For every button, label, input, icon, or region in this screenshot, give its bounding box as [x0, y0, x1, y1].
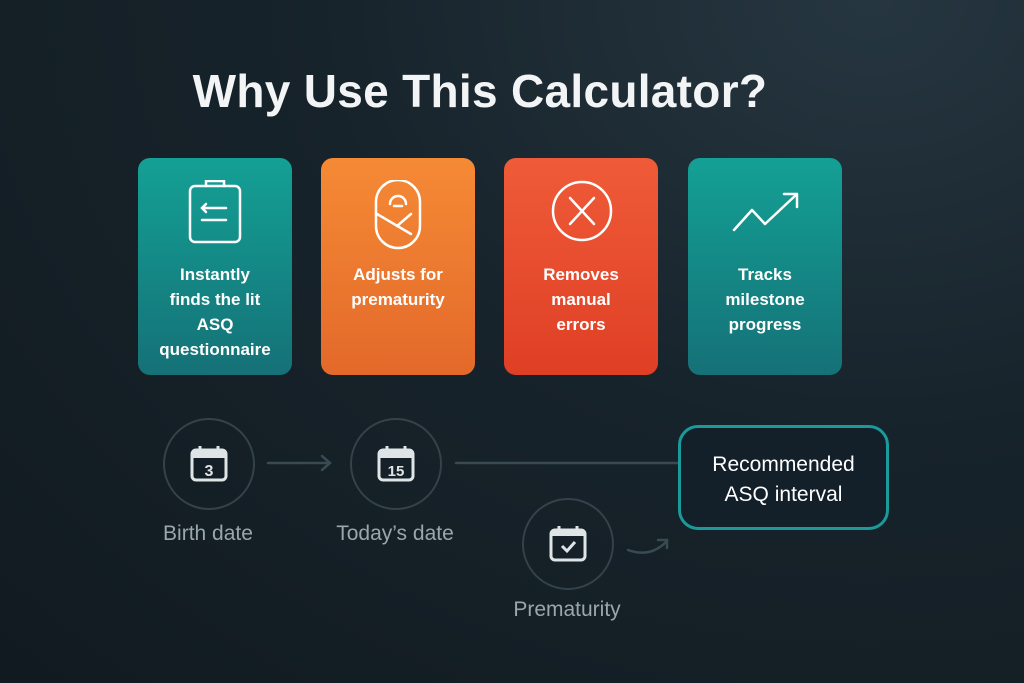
result box — [678, 425, 889, 530]
label: prematurity: Prematurity — [513, 598, 621, 621]
card: instantly finds: finds the lit — [170, 290, 260, 309]
title: Why Use This Calculator? — [193, 65, 767, 117]
card: instantly finds — [138, 158, 292, 375]
card: removes errors: Removes — [543, 265, 619, 284]
step: birth date — [163, 418, 255, 510]
step: birth date: 3 — [205, 463, 214, 480]
icon: x circle — [552, 180, 612, 242]
label: birth date: Birth date — [163, 522, 253, 545]
card: adjusts for prematurity: Adjusts for — [353, 265, 443, 284]
card: adjusts for prematurity — [321, 158, 475, 375]
card: instantly finds: questionnaire — [159, 340, 271, 359]
card: removes errors — [504, 158, 658, 375]
card: removes errors: errors — [556, 315, 606, 334]
icon: clipboard — [188, 180, 242, 244]
step: prematurity — [522, 498, 614, 590]
card: adjusts for prematurity: prematurity — [351, 290, 445, 309]
icon: trend arrow — [732, 192, 798, 232]
card: instantly finds: Instantly — [180, 265, 250, 284]
icon: swaddled baby — [374, 180, 422, 250]
card: instantly finds: ASQ — [197, 315, 233, 334]
card: tracks progress: Tracks — [738, 265, 792, 284]
card: tracks progress: progress — [729, 315, 801, 334]
card: tracks progress: milestone — [725, 290, 805, 309]
card: tracks progress — [688, 158, 842, 375]
result box: Recommended — [712, 453, 855, 476]
step: today's date — [350, 418, 442, 510]
card: removes errors: manual — [551, 290, 611, 309]
label: today's date: Today’s date — [336, 522, 454, 545]
step: today's date: 15 — [388, 463, 404, 480]
result box: ASQ interval — [725, 483, 842, 506]
